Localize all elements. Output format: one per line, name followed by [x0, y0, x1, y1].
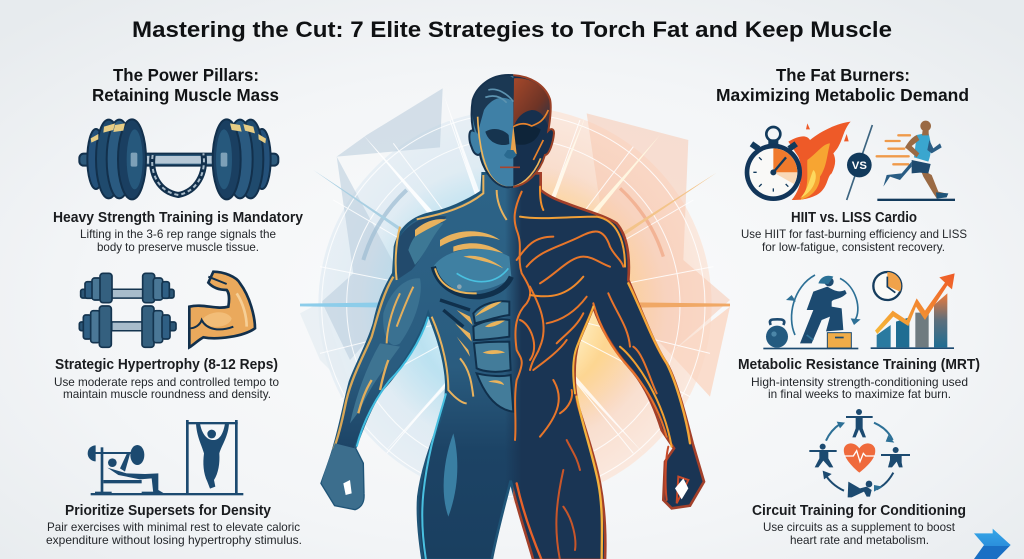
block: supersets: expenditure without losing hypertrophy stimulus. — [46, 533, 302, 547]
icon: stacked dumbbells — [79, 273, 176, 347]
heading: fat burners: The Fat Burners: — [776, 65, 910, 85]
icon: runner — [877, 121, 955, 201]
block: circuit training: Circuit Training for Conditioning — [752, 503, 966, 519]
icon: flexed bicep — [189, 272, 255, 347]
block: heavy strength: Heavy Strength Training is Mandatory — [53, 210, 303, 226]
heading: power pillars: Retaining Muscle Mass — [92, 85, 279, 105]
block: metabolic resistance training: Metabolic Resistance Training (MRT) — [738, 357, 980, 373]
heading: power pillars — [92, 65, 279, 105]
right hand opening — [675, 478, 688, 499]
block: circuit training: Use circuits as a supplement to boost — [763, 520, 956, 534]
block: strategic hypertrophy: maintain muscle roundness and density. — [63, 387, 271, 401]
block: strategic hypertrophy: Strategic Hypertrophy (8-12 Reps) — [55, 357, 278, 373]
heading: power pillars: The Power Pillars: — [113, 65, 259, 85]
block: supersets: Pair exercises with minimal rest to elevate caloric — [47, 520, 300, 534]
central figure: half muscle, half fat-burning — [322, 75, 704, 559]
heading: fat burners: Maximizing Metabolic Demand — [716, 85, 969, 105]
title: Mastering the Cut: 7 Elite Strategies to Torch Fat and Keep Muscle — [132, 17, 892, 42]
body silhouette — [322, 173, 704, 559]
block: hiit vs liss: Use HIIT for fast-burning efficiency and LISS — [741, 227, 967, 241]
head — [469, 75, 554, 187]
icon: clock and rising chart — [871, 272, 955, 349]
panel: right column, fat burners — [716, 65, 980, 547]
block: metabolic resistance training — [738, 357, 980, 401]
right side fire veins — [515, 187, 690, 559]
block: heavy strength — [53, 210, 303, 254]
icon: bench press and pull-up — [88, 420, 243, 495]
block: heavy strength: Lifting in the 3-6 rep range signals the — [80, 227, 276, 241]
block: hiit vs liss: for low-fatigue, consistent recovery. — [762, 240, 945, 254]
block: hiit vs liss — [741, 210, 967, 254]
block: supersets: Prioritize Supersets for Density — [65, 503, 271, 519]
left side muscles — [322, 175, 513, 559]
block: supersets — [46, 503, 302, 547]
heading: fat burners — [716, 65, 969, 105]
block: strategic hypertrophy: Use moderate reps and controlled tempo to — [54, 375, 279, 389]
icon: versus badge: VS — [852, 160, 867, 172]
block: metabolic resistance training: in final weeks to maximize fat burn. — [768, 387, 951, 401]
block: metabolic resistance training: High-intensity strength-conditioning used — [751, 375, 968, 389]
block: circuit training — [752, 503, 966, 547]
icon: circuit with heart — [809, 409, 910, 497]
icon: chained barbell — [79, 119, 278, 199]
icon: kettlebell and step-up athlete — [763, 275, 861, 349]
panel: left column, retaining muscle — [46, 65, 303, 547]
block: hiit vs liss: HIIT vs. LISS Cardio — [791, 210, 917, 226]
block: heavy strength: body to preserve muscle tissue. — [97, 240, 259, 254]
icon: versus badge — [847, 125, 872, 200]
radial backdrop behind figure — [300, 88, 730, 503]
block: circuit training: heart rate and metabolism. — [790, 533, 929, 547]
block: strategic hypertrophy — [54, 357, 279, 401]
icon: stopwatch with flame — [745, 122, 851, 201]
arrow: next page — [974, 529, 1011, 559]
